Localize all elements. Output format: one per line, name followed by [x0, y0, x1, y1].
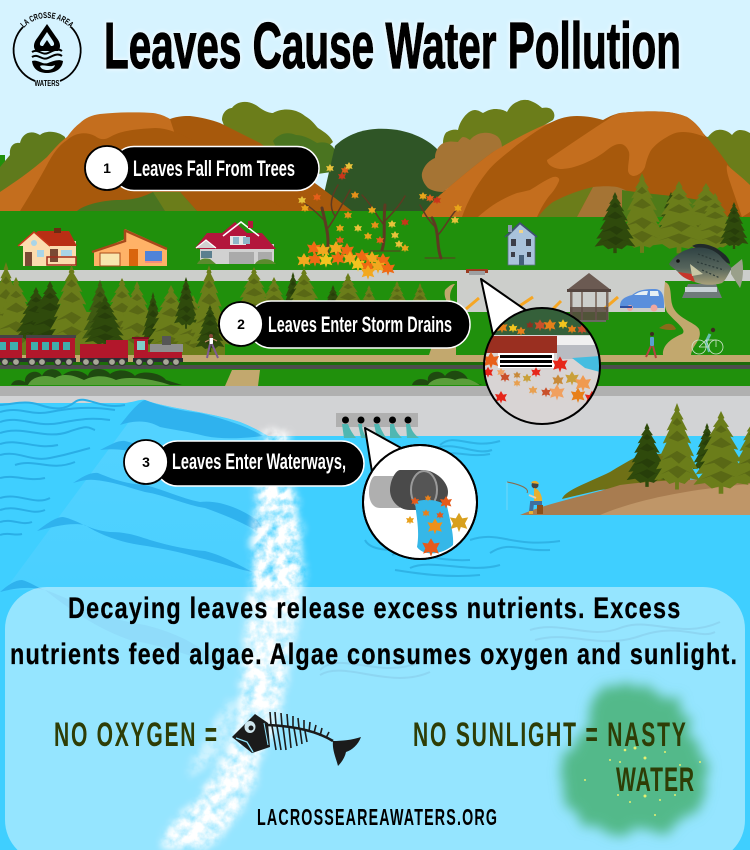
car	[620, 289, 664, 312]
tender	[80, 340, 128, 358]
pipe	[369, 470, 448, 510]
number: 1	[103, 160, 111, 176]
pedestrian walking	[646, 332, 656, 358]
house: red roof mansion	[195, 221, 276, 264]
wheels	[2, 358, 180, 366]
callout: storm drain close-up	[481, 279, 600, 424]
step text: Leaves Fall From Trees	[133, 156, 295, 181]
concrete shoreline	[0, 396, 750, 438]
pouring water	[415, 500, 453, 553]
gazebo	[567, 273, 611, 322]
hills and background bushes	[0, 100, 750, 217]
logo ring	[14, 27, 81, 81]
callout circle	[363, 445, 477, 559]
right conifer trees	[595, 173, 748, 254]
step 3 label	[124, 440, 364, 486]
logo water drop	[32, 24, 63, 73]
runner	[205, 334, 218, 358]
water	[0, 400, 750, 850]
center lower hill pieces	[0, 112, 300, 211]
left water body	[0, 400, 268, 600]
train	[0, 335, 183, 366]
light water plane	[5, 400, 272, 590]
number: 2	[237, 316, 245, 332]
house: orange ranch	[92, 229, 167, 266]
green lawn	[0, 211, 750, 387]
right olive bush	[443, 100, 554, 170]
sky background	[0, 0, 750, 218]
house: blue tall	[505, 223, 537, 265]
fisherman	[507, 481, 543, 514]
tree trunks	[305, 185, 458, 258]
street	[0, 270, 750, 281]
pill	[155, 441, 364, 486]
pectoral fin	[690, 264, 703, 276]
callout tail	[365, 428, 403, 472]
eye	[676, 259, 680, 263]
callout: outfall pipe close-up	[363, 428, 477, 559]
number badge	[85, 146, 129, 190]
shore conifers	[627, 403, 750, 494]
step 1 label	[85, 146, 319, 190]
line 2: nutrients feed algae. Algae consumes oxygen and sunlight.	[10, 637, 737, 671]
step text: Leaves Enter Waterways,	[172, 449, 346, 474]
body	[669, 247, 732, 285]
small dirt patch	[659, 324, 676, 330]
scattered leaves on trees	[298, 162, 462, 252]
shore with fisherman and trees	[507, 403, 750, 515]
houses	[18, 221, 537, 266]
callout circle contents	[485, 309, 599, 404]
scale lines	[697, 254, 724, 278]
body text	[10, 591, 737, 671]
brown bush	[422, 133, 502, 192]
railway track	[0, 362, 750, 369]
website: LACROSSEAREAWATERS.ORG	[257, 806, 497, 831]
bluegill fish statue	[669, 244, 743, 298]
pill	[112, 146, 319, 190]
left forest	[0, 262, 432, 357]
far right bush	[700, 130, 750, 198]
cyclist	[692, 328, 723, 354]
line 1: Decaying leaves release excess nutrients. Excess	[68, 591, 680, 625]
right ripples	[365, 440, 560, 576]
left thin wave lines	[0, 400, 125, 535]
passenger cars	[0, 335, 76, 362]
autumn trees and falling leaves	[297, 162, 462, 280]
pill	[248, 301, 470, 348]
tan paths	[0, 282, 750, 386]
gray retaining band	[0, 386, 750, 396]
wave ribbons	[0, 400, 267, 670]
icon: fish skeleton	[232, 712, 361, 766]
pedestal	[682, 284, 722, 298]
leaf pile	[297, 241, 395, 280]
callout circle outline	[484, 308, 600, 424]
storm drain on street	[466, 269, 488, 275]
tan path over forest base	[0, 355, 750, 362]
information panel background	[5, 587, 745, 850]
leaves in water	[406, 495, 468, 557]
logo	[12, 12, 82, 88]
belly red	[678, 272, 695, 282]
algae bloom	[561, 684, 709, 833]
callout tail	[481, 279, 527, 335]
bushes along track	[11, 369, 482, 385]
no sunlight text: NO SUNLIGHT = NASTY	[413, 715, 686, 753]
tail	[731, 259, 743, 288]
algae sparkles	[584, 744, 701, 816]
number badge	[124, 440, 168, 484]
right hill	[422, 111, 750, 217]
parking lot	[457, 281, 665, 312]
step 2 label	[219, 301, 470, 348]
step text: Leaves Enter Storm Drains	[268, 312, 452, 337]
number: 3	[142, 454, 150, 470]
locomotive	[132, 336, 183, 362]
number badge	[219, 302, 263, 346]
pale plume of nutrient runoff	[162, 431, 303, 849]
house: yellow cottage	[18, 228, 77, 266]
logo text: LA CROSSE AREA	[20, 12, 74, 28]
outfall pipes	[336, 413, 419, 438]
logo text bottom: WATERS	[34, 79, 60, 88]
water text: WATER	[616, 760, 694, 798]
panel-level ripples	[320, 622, 720, 678]
dorsal fin	[692, 244, 730, 264]
no oxygen text: NO OXYGEN =	[54, 715, 217, 753]
